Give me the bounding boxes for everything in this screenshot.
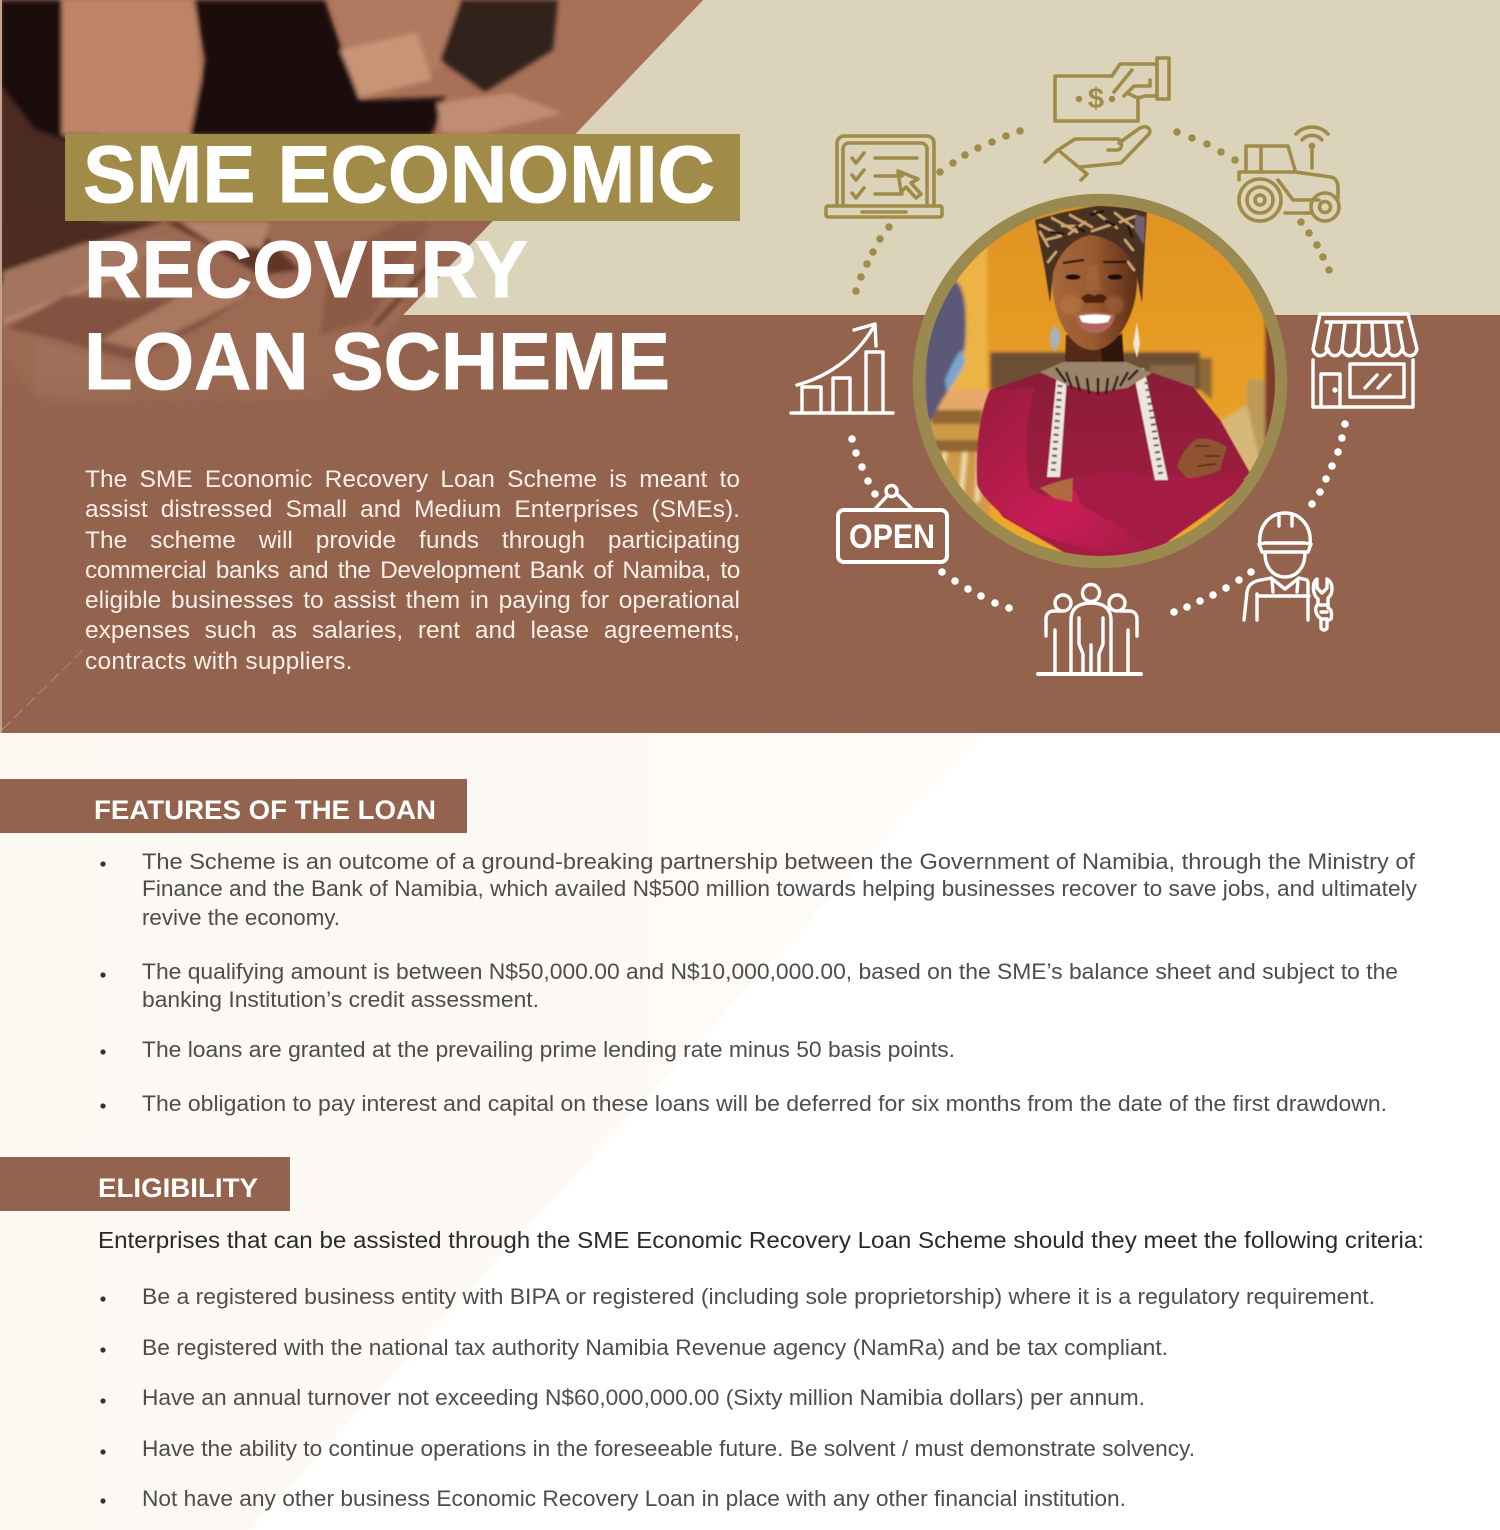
background photo: hands on a laptop, duotone	[0, 0, 710, 430]
icon: open sign	[838, 486, 947, 562]
icon: shop front	[1313, 314, 1417, 407]
icon: hand giving money to open hand	[1045, 58, 1169, 180]
icon: construction worker with wrench	[1244, 513, 1332, 630]
icon: smart tractor	[1239, 127, 1339, 221]
section heading: eligibility: ELIGIBILITY	[98, 1173, 258, 1203]
intro paragraph: The SME Economic Recovery Loan Scheme is meant to	[85, 466, 740, 493]
list: eligibility criteria: Be a registered business entity with BIPA or registered (including sole proprietorship) where it is a regulatory requirement.	[142, 1284, 1375, 1309]
intro paragraph: commercial banks and the Development Bank of Namiba, to	[85, 557, 740, 584]
woman portrait in circle	[919, 190, 1290, 570]
icon: group of people	[1038, 584, 1141, 674]
section heading: features of the loan: FEATURES OF THE LOAN	[94, 795, 436, 825]
hero background panel	[0, 0, 1500, 733]
icon: hand giving money to open hand: $	[1088, 83, 1104, 115]
list: eligibility criteria: Be registered with the national tax authority Namibia Revenue agency (NamRa) and be tax compliant.	[142, 1335, 1168, 1360]
list: features of the loan: The obligation to pay interest and capital on these loans will be deferred for six months from the date of the first drawdown.	[142, 1091, 1387, 1116]
list: features of the loan	[100, 849, 1418, 1116]
list: features of the loan: banking Institution’s credit assessment.	[142, 987, 539, 1012]
intro paragraph: The scheme will provide funds through participating	[85, 527, 740, 554]
icon: open sign: OPEN	[849, 518, 935, 556]
title: RECOVERY	[84, 225, 528, 315]
title banner	[65, 134, 740, 221]
dotted ring, gold part	[852, 127, 1333, 295]
list: features of the loan: Finance and the Bank of Namibia, which availed N$500 million towards helping businesses recover to save jobs, and ultimately	[142, 876, 1418, 901]
intro paragraph: eligible businesses to assist them in paying for operational	[85, 587, 740, 614]
list: features of the loan: The qualifying amount is between N$50,000.00 and N$10,000,000.00, based on the SME’s balance sheet and subject to the	[142, 959, 1398, 984]
list: eligibility criteria	[100, 1284, 1375, 1511]
title: SME ECONOMIC	[83, 130, 715, 220]
title: LOAN SCHEME	[84, 317, 670, 407]
icon: laptop checklist	[826, 136, 942, 217]
intro paragraph: expenses such as salaries, rent and lease agreements,	[85, 617, 740, 644]
section heading: features of the loan	[0, 779, 467, 833]
list: eligibility criteria: Have an annual turnover not exceeding N$60,000,000.00 (Sixty million Namibia dollars) per annum.	[142, 1385, 1145, 1410]
list: features of the loan: The loans are granted at the prevailing prime lending rate minus 50 basis points.	[142, 1037, 955, 1062]
intro paragraph	[85, 466, 740, 675]
icon: bar chart with rising arrow	[791, 324, 893, 413]
list: features of the loan: The Scheme is an outcome of a ground-breaking partnership between the Government of Namibia, through the Ministry of	[142, 849, 1416, 874]
photo background: blurred shop	[925, 206, 1275, 556]
intro paragraph: assist distressed Small and Medium Enterprises (SMEs).	[85, 496, 740, 523]
list: features of the loan: revive the economy.	[142, 905, 340, 930]
faint dashed line in hero	[2, 648, 85, 730]
list: eligibility criteria: Have the ability to continue operations in the foreseeable future. Be solvent / must demonstrate solvency.	[142, 1436, 1195, 1461]
list: eligibility criteria: Not have any other business Economic Recovery Loan in place with any other financial institution.	[142, 1486, 1126, 1511]
section heading: eligibility	[0, 1157, 290, 1211]
lower content background wedge	[0, 733, 982, 1530]
title	[83, 130, 715, 407]
woman figure	[977, 205, 1250, 560]
intro paragraph: contracts with suppliers.	[85, 648, 353, 675]
dotted ring, white part	[848, 420, 1349, 616]
eligibility intro sentence: Enterprises that can be assisted through the SME Economic Recovery Loan Scheme should they meet the following criteria:	[98, 1227, 1424, 1253]
